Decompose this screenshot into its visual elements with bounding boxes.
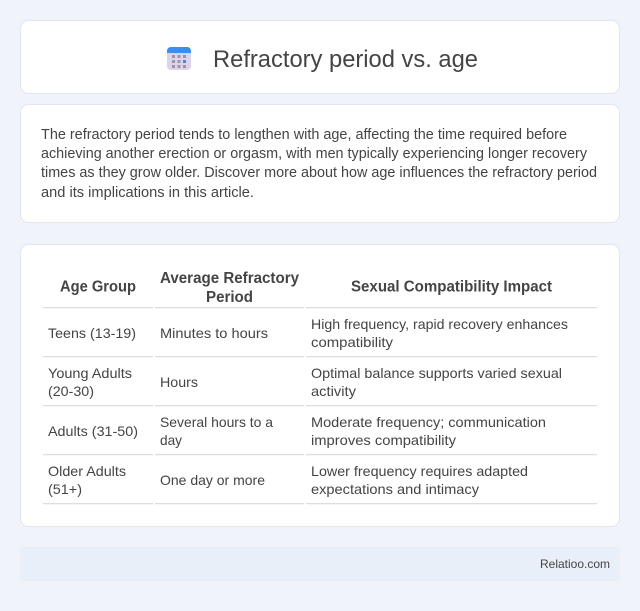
row: older adults: expectations and intimacy — [311, 481, 479, 497]
row: young adults: (20-30) — [48, 383, 94, 399]
row: teens: Teens (13-19) — [48, 325, 136, 341]
row: adults: Several hours to a — [160, 414, 273, 430]
intro text: times as they grow older. Discover more about how age influences the refractory period — [41, 165, 597, 181]
panel: title card — [20, 20, 620, 94]
intro text: achieving another erection or orgasm, with men typically experiencing longer recovery — [41, 146, 588, 162]
intro text: and its implications in this article. — [41, 185, 254, 201]
table header: Average Refractory — [160, 270, 299, 287]
table header: Period — [206, 289, 253, 306]
intro text — [41, 127, 597, 201]
row: young adults: Young Adults — [48, 365, 132, 381]
row: young adults — [48, 365, 562, 399]
panel: comparison table — [20, 244, 620, 526]
table header: Age Group — [60, 278, 136, 296]
row: young adults: Optimal balance supports varied sexual — [311, 365, 562, 381]
icon: calendar — [167, 47, 191, 70]
row: older adults: Lower frequency requires adapted — [311, 463, 528, 479]
title: Refractory period vs. age — [213, 46, 478, 73]
table header: Sexual Compatibility Impact — [351, 278, 552, 296]
row: young adults: activity — [311, 383, 356, 399]
row: teens — [48, 316, 568, 350]
row: older adults: (51+) — [48, 481, 82, 497]
panel: introduction — [20, 104, 620, 222]
footer bar — [20, 547, 620, 581]
row: adults: Moderate frequency; communication — [311, 414, 546, 430]
intro text: The refractory period tends to lengthen with age, affecting the time required before — [41, 127, 567, 143]
row: teens: compatibility — [311, 334, 393, 350]
row: older adults — [48, 463, 528, 497]
row: young adults: Hours — [160, 374, 198, 390]
table header — [60, 270, 552, 306]
row: teens: Minutes to hours — [160, 325, 268, 341]
row: adults: day — [160, 432, 182, 448]
row: teens: High frequency, rapid recovery enhances — [311, 316, 568, 332]
footer credit: Relatioo.com — [540, 557, 610, 571]
row: adults: Adults (31-50) — [48, 423, 138, 439]
row: adults — [48, 414, 546, 448]
row: older adults: One day or more — [160, 472, 265, 488]
row: adults: improves compatibility — [311, 432, 456, 448]
row: older adults: Older Adults — [48, 463, 126, 479]
